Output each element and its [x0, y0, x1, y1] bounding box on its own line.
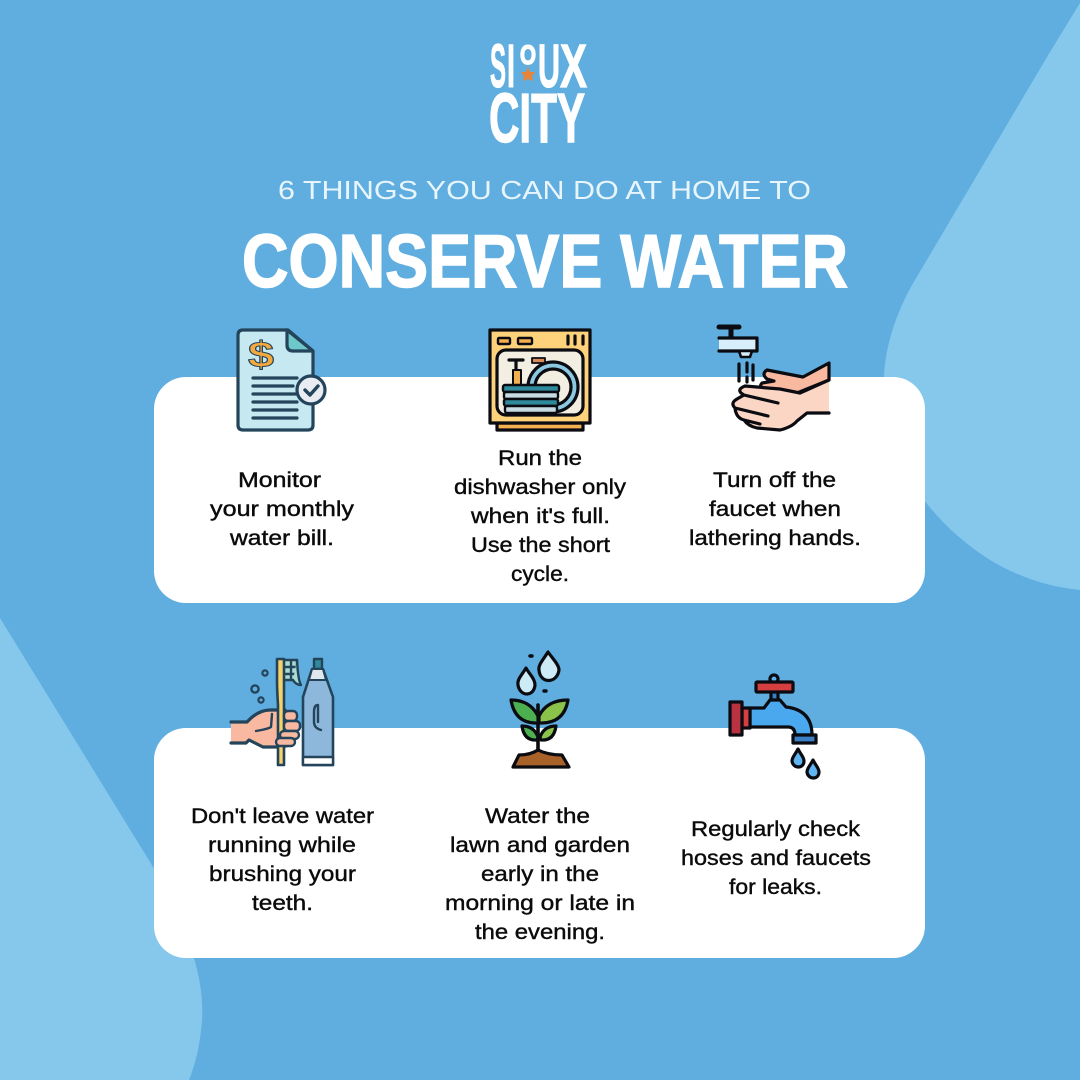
tip: turn off faucet: faucet when [709, 498, 841, 521]
logo: Sioux City: U [538, 32, 560, 100]
title: CONSERVE WATER [242, 219, 848, 303]
tip: brushing teeth: brushing your [209, 863, 356, 886]
tip: turn off faucet: Turn off the [713, 469, 836, 492]
icon: toothbrush and toothpaste [231, 659, 333, 765]
tip: dishwasher: when it's full. [470, 505, 610, 528]
icon: plant with water drops [511, 652, 569, 767]
icon: leaking faucet [730, 675, 819, 778]
logo: Sioux City [489, 32, 587, 157]
tip: watering lawn [445, 805, 635, 944]
tip: watering lawn: early in the [481, 863, 599, 886]
tip: dishwasher: cycle. [511, 563, 569, 586]
tip: monitor bill [210, 469, 355, 550]
tip: check for leaks: hoses and faucets [681, 847, 871, 870]
tip: brushing teeth: running while [208, 834, 356, 857]
icon: water bill: $ [248, 334, 274, 375]
tip: check for leaks: for leaks. [729, 876, 822, 899]
tip: brushing teeth [191, 805, 374, 915]
icon: dishwasher [490, 330, 590, 430]
icon: water bill [238, 330, 325, 430]
tip: dishwasher: Run the [498, 447, 582, 470]
tip: monitor bill: water bill. [229, 527, 334, 550]
tip: turn off faucet: lathering hands. [689, 527, 861, 550]
tip: dishwasher: dishwasher only [454, 476, 627, 499]
tip: dishwasher [454, 447, 627, 586]
panel: top row tips [154, 327, 925, 603]
logo: Sioux City: X [560, 32, 587, 100]
tip: brushing teeth: teeth. [252, 892, 313, 915]
tip: brushing teeth: Don't leave water [191, 805, 374, 828]
logo: Sioux City: I [507, 32, 515, 100]
tip: turn off faucet [689, 469, 861, 550]
logo: Sioux City: S [490, 32, 506, 100]
logo: Sioux City: O [520, 40, 536, 70]
tip: dishwasher: Use the short [471, 534, 610, 557]
tip: check for leaks: Regularly check [691, 818, 861, 841]
tip: watering lawn: the evening. [475, 921, 605, 944]
tip: watering lawn: Water the [485, 805, 590, 828]
tip: watering lawn: morning or late in [445, 892, 635, 915]
logo: Sioux City: CITY [489, 79, 585, 157]
tip: watering lawn: lawn and garden [450, 834, 630, 857]
tip: monitor bill: Monitor [238, 469, 321, 492]
subtitle: 6 THINGS YOU CAN DO AT HOME TO [278, 177, 811, 205]
icon: faucet and hands [719, 327, 829, 430]
tip: monitor bill: your monthly [210, 498, 355, 521]
panel: bottom row tips [154, 652, 925, 958]
tip: check for leaks [681, 818, 871, 899]
